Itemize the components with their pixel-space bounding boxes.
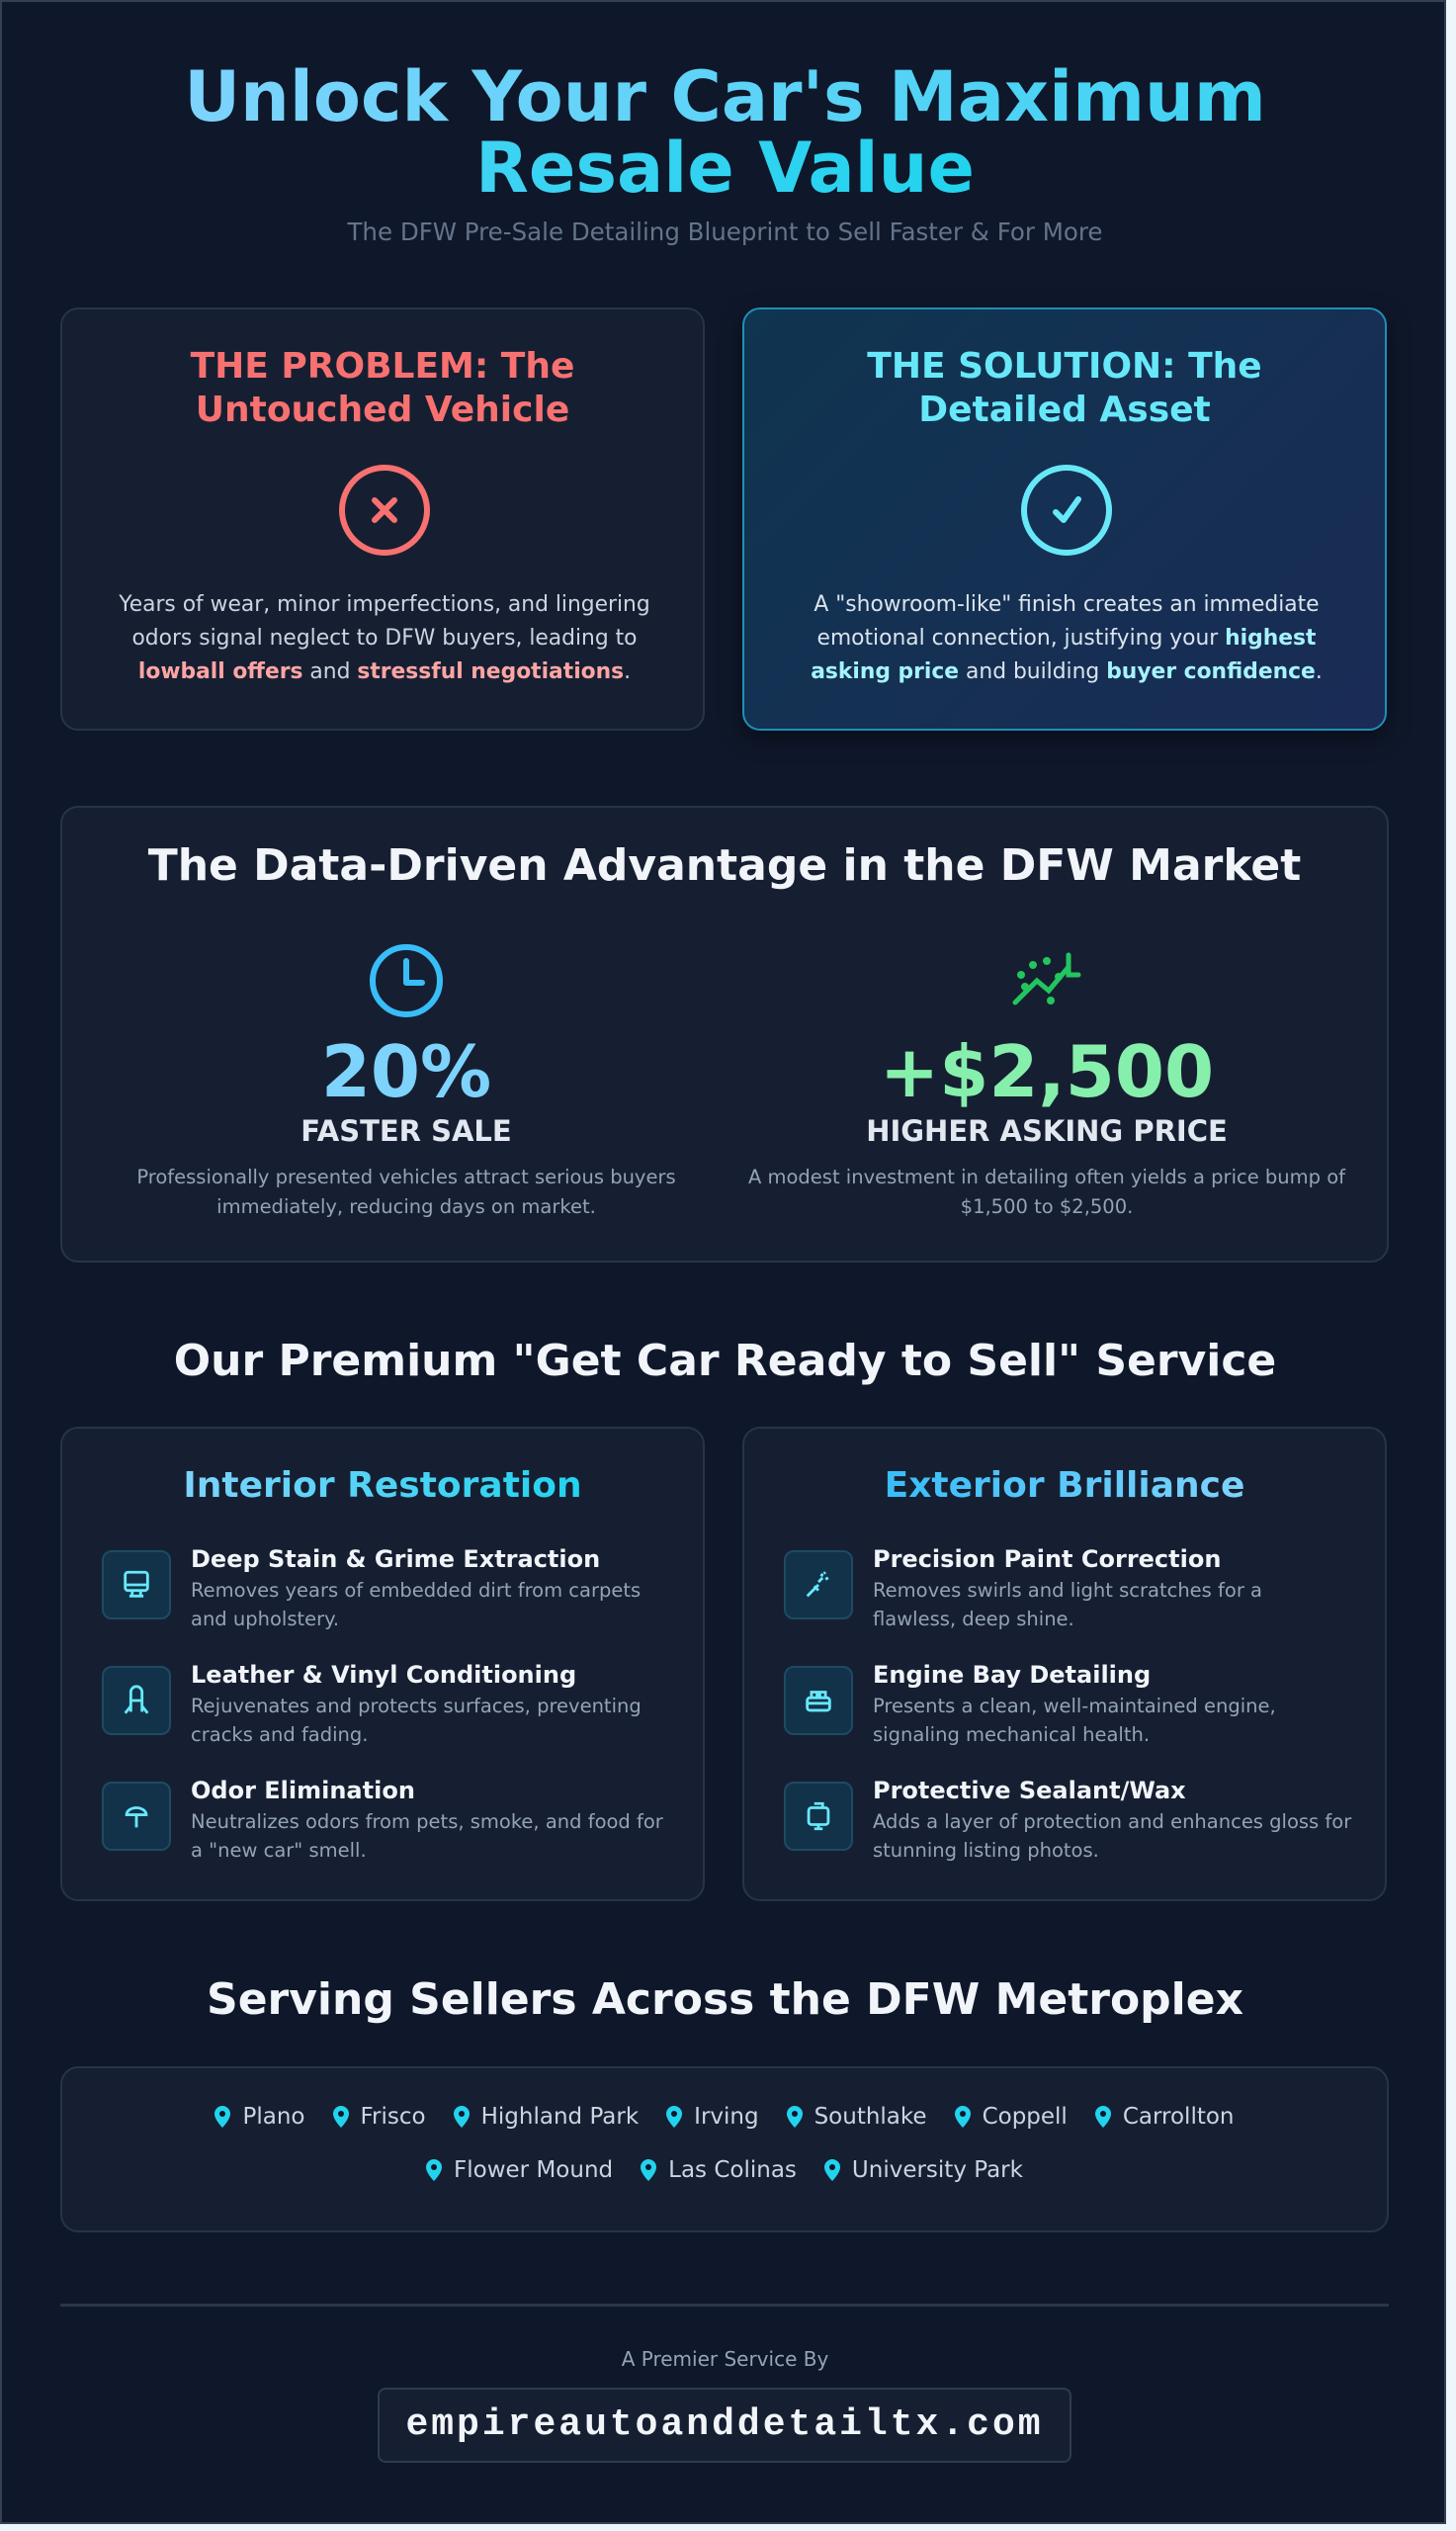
item: odor: Neutralizes odors from pets, smoke, and food for a "new car" smell. <box>191 1810 663 1862</box>
location list: University Park <box>852 2157 1023 2183</box>
item: stain extraction: Deep Stain & Grime Extraction <box>191 1545 600 1573</box>
stats heading: The Data-Driven Advantage in the DFW Market <box>148 840 1301 891</box>
location list: Flower Mound <box>454 2157 613 2183</box>
location list: Highland Park <box>481 2104 639 2130</box>
problem text: Years of wear, minor imperfections, and lingering odors signal neglect to DFW buyers, leading to lowball offers and stressful negotiations. <box>119 592 650 684</box>
stat: higher price <box>748 953 1346 1218</box>
stat: higher price: A modest investment in detailing often yields a price bump of <box>748 1166 1345 1188</box>
stat: faster sale: Professionally presented vehicles attract serious buyers <box>136 1166 676 1188</box>
location list: Plano <box>242 2104 304 2130</box>
location list <box>214 2104 1235 2183</box>
item: sealant: Protective Sealant/Wax <box>873 1777 1186 1804</box>
footer url box: empireautoanddetailtx.com <box>405 2403 1044 2446</box>
panel: data advantage <box>60 806 1389 1263</box>
footer url box <box>378 2388 1071 2463</box>
solution heading <box>867 346 1262 430</box>
stat: higher price: +$2,500 <box>880 1030 1214 1113</box>
panel: interior <box>60 1427 705 1901</box>
areas heading: Serving Sellers Across the DFW Metroplex <box>207 1974 1243 2025</box>
problem heading <box>190 346 574 430</box>
item: leather <box>102 1661 642 1746</box>
item: engine bay: Presents a clean, well-maintained engine, signaling mechanical health. <box>873 1695 1276 1746</box>
item: engine bay <box>784 1661 1276 1746</box>
interior heading: Interior Restoration <box>183 1465 582 1506</box>
item: sealant: Adds a layer of protection and enhances gloss for stunning listing photos. <box>873 1810 1351 1862</box>
title: Unlock Your Car's Maximum <box>184 56 1266 137</box>
problem heading: Untouched Vehicle <box>196 390 569 430</box>
panel: solution <box>742 307 1387 731</box>
location list: Irving <box>694 2104 759 2130</box>
solution heading: Detailed Asset <box>918 390 1211 430</box>
location list: Carrollton <box>1123 2104 1235 2130</box>
stat: higher price: HIGHER ASKING PRICE <box>866 1114 1228 1148</box>
icon: clock <box>370 944 443 1017</box>
item: leather: Leather & Vinyl Conditioning <box>191 1661 576 1689</box>
panel: exterior <box>742 1427 1387 1901</box>
panel: problem <box>60 307 705 731</box>
item: paint correction: Removes swirls and light scratches for a flawless, deep shine. <box>873 1579 1262 1630</box>
icon: x circle <box>339 465 430 556</box>
item: paint correction: Precision Paint Correction <box>873 1545 1221 1573</box>
item: leather: Rejuvenates and protects surfaces, preventing cracks and fading. <box>191 1695 642 1746</box>
title: Resale Value <box>475 128 975 209</box>
services heading: Our Premium "Get Car Ready to Sell" Service <box>174 1336 1276 1386</box>
stat: higher price: $1,500 to $2,500. <box>961 1195 1133 1218</box>
item: paint correction <box>784 1545 1262 1630</box>
panel: locations <box>60 2066 1389 2232</box>
icon: check circle <box>1021 465 1112 556</box>
stat: faster sale: 20% <box>321 1030 491 1113</box>
solution text: A "showroom-like" finish creates an immediate emotional connection, justifying your highest asking price and building buyer confidence. <box>811 592 1323 684</box>
title <box>184 56 1266 209</box>
stat: faster sale: FASTER SALE <box>300 1114 512 1148</box>
location list: Las Colinas <box>668 2157 797 2183</box>
item: stain extraction <box>102 1545 641 1630</box>
stat: faster sale: immediately, reducing days on market. <box>216 1195 596 1218</box>
item: engine bay: Engine Bay Detailing <box>873 1661 1151 1689</box>
location list: Coppell <box>983 2104 1068 2130</box>
stat: faster sale <box>136 944 676 1218</box>
problem heading: THE PROBLEM: The <box>191 346 574 387</box>
footer label: A Premier Service By <box>622 2347 828 2371</box>
location list: Southlake <box>814 2104 927 2130</box>
item: odor <box>102 1777 663 1862</box>
subtitle: The DFW Pre-Sale Detailing Blueprint to Sell Faster & For More <box>347 218 1103 246</box>
item: sealant <box>784 1777 1352 1862</box>
location list: Frisco <box>360 2104 426 2130</box>
icon: scatter chart <box>1012 953 1081 1004</box>
solution heading: THE SOLUTION: The <box>867 346 1262 387</box>
exterior heading: Exterior Brilliance <box>885 1465 1244 1506</box>
item: odor: Odor Elimination <box>191 1777 415 1804</box>
item: stain extraction: Removes years of embedded dirt from carpets and upholstery. <box>191 1579 641 1630</box>
